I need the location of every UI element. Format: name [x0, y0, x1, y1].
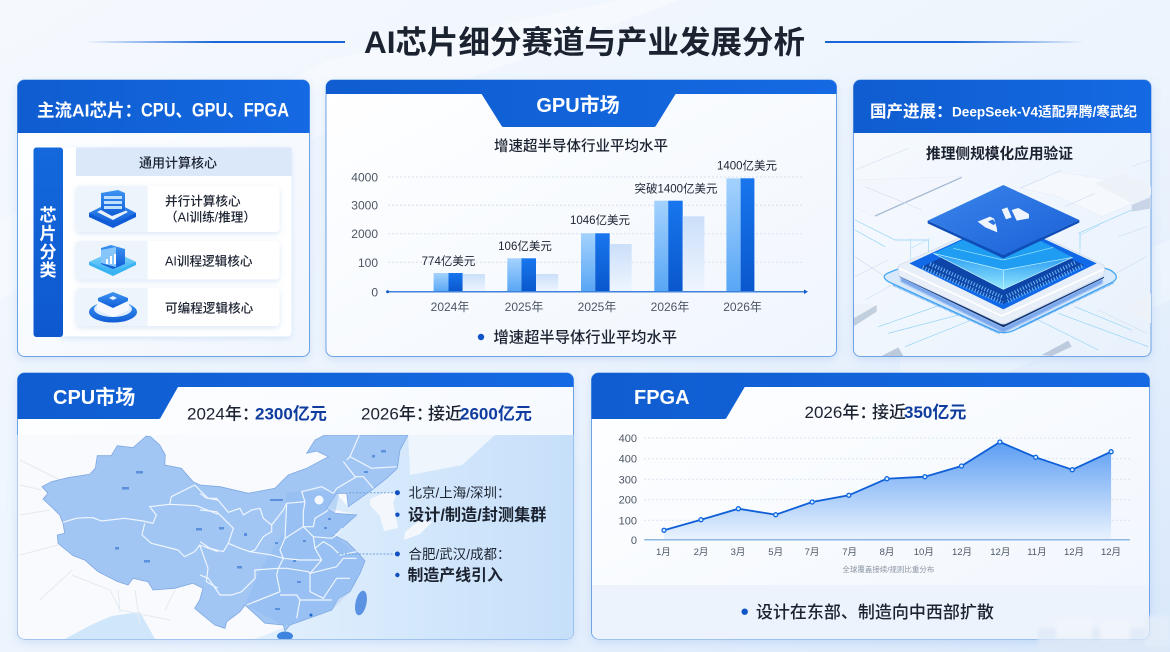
y axis labels: 2000: [351, 227, 378, 241]
chip top die: [928, 220, 1079, 258]
panel: domestic progress: [853, 80, 1152, 356]
bar value labels: 106亿美元: [498, 239, 552, 253]
panel header: CPU market: CPU市场: [53, 385, 135, 409]
vertical label: chip categories: [34, 148, 63, 337]
taiwan: [355, 590, 367, 616]
vertical label: chip categories: 类: [40, 261, 56, 280]
hainan: [277, 632, 293, 639]
provinces fill: [42, 435, 408, 631]
callout: design hubs: 北京/上海/深圳：: [408, 486, 511, 500]
y axis labels: 100: [619, 515, 637, 527]
card: parallel computing core: 并行计算核心: [165, 194, 241, 208]
die logo: [978, 207, 1029, 232]
y axis labels: 100: [358, 256, 378, 270]
chip illustration: [853, 148, 1152, 356]
x axis labels: 5月: [768, 547, 783, 558]
icon: layered chip: [89, 292, 137, 322]
stat: 2024: 2024年：: [187, 404, 259, 424]
title: AI芯片细分赛道与产业发展分析: [364, 24, 805, 60]
row header: general computing core: 通用计算核心: [139, 156, 217, 170]
panel header: mainstream AI chips: [18, 80, 310, 133]
panel header: domestic progress: DeepSeek-V4适配昇腾/寒武纪: [952, 104, 1137, 120]
chip glass layer: [934, 238, 1072, 270]
leader lines: [338, 493, 394, 554]
y axis labels: 300: [619, 474, 637, 486]
x axis labels: 12月: [1101, 547, 1121, 558]
icon: server stack: [89, 190, 136, 228]
y axis labels: 400: [619, 433, 637, 445]
x axis labels: 10月: [914, 547, 934, 558]
eastern province borders: [200, 435, 397, 618]
takeaway: 设计在东部、制造向中西部扩散: [756, 603, 994, 622]
panel: CPU market: [18, 373, 574, 640]
stat: 2024: 2300亿元: [255, 404, 327, 424]
circuit board background: [853, 148, 1152, 356]
x axis labels: 2026年: [723, 300, 762, 314]
x axis labels: 2月: [694, 547, 708, 558]
x axis: [388, 291, 806, 293]
content tray: [60, 148, 292, 336]
card: AI training logic core: [76, 241, 280, 280]
bar value labels: 1046亿美元: [570, 213, 631, 227]
stat: 2026: 2026年：: [361, 404, 433, 424]
x axis labels: 11月: [1027, 547, 1047, 558]
stat: 2026: 接近: [428, 404, 462, 424]
callout: design hubs: [395, 486, 546, 524]
China map: [18, 435, 574, 640]
card: parallel computing core: （AI训练/推理）: [165, 210, 256, 224]
x axis labels: 2025年: [505, 300, 543, 314]
x axis labels: 12月: [1064, 547, 1084, 558]
chart subtitle: 增速超半导体行业平均水平: [494, 137, 668, 155]
y axis labels: 0: [371, 286, 378, 300]
chip blue cavity: [909, 238, 1097, 310]
x axis labels: 12月: [990, 547, 1010, 558]
bar value labels: [422, 158, 778, 268]
sea: [255, 435, 574, 639]
bar value labels: 突破1400亿美元: [634, 182, 718, 196]
bars: [434, 178, 754, 292]
x axis labels: 2024年: [431, 300, 469, 314]
korea and japan: [370, 492, 432, 540]
vertical label: chip categories: 分: [40, 243, 56, 262]
chart source note: 全球覆盖接续/规则比重分布: [842, 564, 935, 574]
y axis labels: 400: [619, 454, 637, 466]
x axis labels: [656, 547, 1121, 558]
neighbour borders: [20, 460, 175, 625]
callout: design hubs: 设计/制造/封测集群: [408, 506, 546, 524]
callout: manufacturing hubs: 合肥/武汉/成都：: [408, 547, 511, 562]
y axis labels: 3000: [351, 198, 378, 212]
chip base frame: [901, 277, 1103, 333]
watermark smudge: [1038, 616, 1170, 652]
panel header: FPGA: FPGA: [634, 387, 690, 409]
callout: manufacturing hubs: 制造产线引入: [408, 566, 503, 584]
x axis labels: 1月: [656, 547, 671, 558]
bar value labels: 1400亿美元: [717, 158, 778, 172]
bar value labels: 774亿美元: [422, 254, 476, 268]
chip caption: 推理侧规模化应用验证: [926, 144, 1073, 162]
panel: FPGA: [592, 373, 1150, 639]
panel header: mainstream AI chips: 主流AI芯片：: [37, 100, 142, 120]
x axis labels: 3月: [731, 547, 745, 558]
y axis labels: 0: [631, 535, 637, 547]
x axis labels: 7月: [805, 547, 819, 558]
panel: GPU market: [326, 80, 836, 356]
panel header: mainstream AI chips: CPU、GPU、FPGA: [141, 100, 289, 122]
x axis labels: 2026年: [651, 300, 689, 314]
legend: 增速超半导体行业平均水平: [494, 328, 677, 346]
icon: bar chart tablet: [89, 245, 136, 276]
panel header: domestic progress: 国产进展：: [870, 102, 952, 121]
y axis labels: 4000: [351, 170, 378, 184]
eastern province tint: [245, 490, 365, 625]
bottom band: [592, 585, 1149, 639]
stat: 2026: 2600亿元: [460, 404, 532, 424]
chip thin connector lines: [911, 225, 1100, 260]
data points: [662, 440, 1113, 532]
card: programmable logic core: [76, 288, 280, 326]
province markers: [115, 450, 386, 610]
bar chart: [351, 158, 808, 314]
x axis labels: 8月: [880, 547, 894, 558]
callout: manufacturing hubs: [395, 547, 511, 584]
panel: mainstream AI chips: [18, 80, 310, 356]
x axis labels: [431, 300, 762, 314]
card: AI training logic core: AI训程逻辑核心: [165, 254, 253, 268]
vertical label: chip categories: 片: [40, 224, 56, 244]
chart title: 接近: [872, 403, 906, 422]
y axis labels: [351, 170, 378, 300]
chip outer plate: [884, 268, 1117, 334]
bay of bengal: [65, 612, 155, 639]
x axis labels: 12月: [952, 547, 972, 558]
panel header: domestic progress: [854, 80, 1151, 133]
vertical label: chip categories: 芯: [40, 206, 56, 225]
western province borders: [63, 485, 218, 588]
row header: general computing core: [76, 148, 292, 176]
y axis labels: 200: [619, 495, 637, 507]
x axis labels: 7月: [842, 547, 857, 558]
panel header: GPU market: GPU市场: [536, 93, 620, 117]
x axis labels: 2025年: [578, 300, 616, 314]
card: programmable logic core: 可编程逻辑核心: [165, 300, 254, 316]
chart title: 2026年：: [804, 403, 876, 422]
panel header: GPU market: [326, 80, 836, 127]
area chart: [619, 433, 1130, 574]
panel header: FPGA: [592, 373, 1150, 419]
beijing marker: [314, 496, 324, 504]
panel header: CPU market: [18, 373, 574, 419]
card: parallel computing core: [76, 186, 280, 232]
chart title: 350亿元: [904, 403, 966, 422]
y axis labels: [619, 433, 637, 547]
